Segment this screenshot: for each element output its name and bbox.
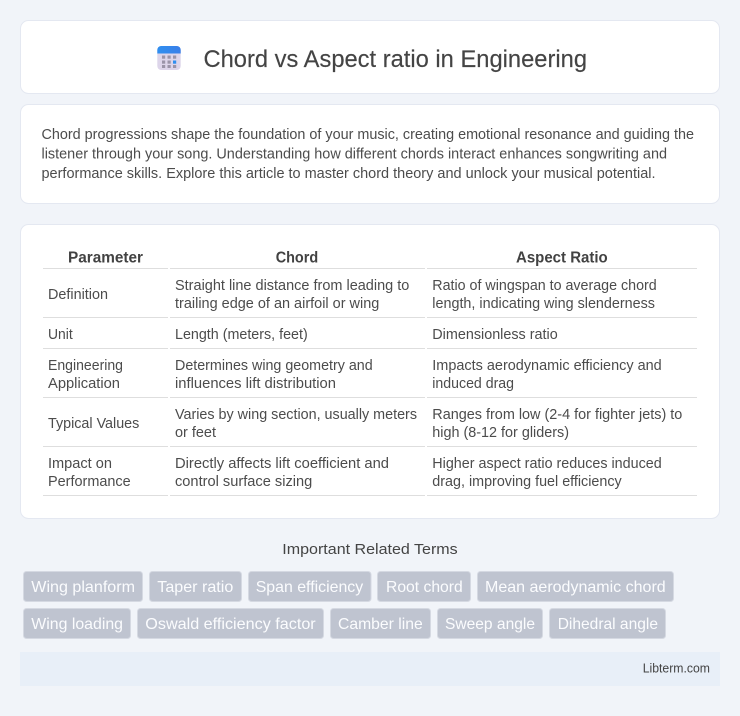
tag: camber line [330,608,430,638]
row: typical values: Varies by wing section, usually meters [175,407,417,423]
intro text: listener through your song. Understanding how different chords interact enhances songwriting and [42,146,667,162]
row: impact on performance: drag, improving fuel efficiency [432,474,622,490]
row: definition: Straight line distance from leading to [175,278,409,294]
tag: wing planform [24,572,142,602]
tag: mean aerodynamic chord: Mean aerodynamic chord [485,579,666,596]
title: Chord vs Aspect ratio in Engineering [204,46,587,73]
row: definition: Ratio of wingspan to average chord [432,278,657,294]
tag: wing loading [24,608,130,638]
tag: wing loading: Wing loading [31,616,123,633]
row: engineering application: Engineering [48,358,123,374]
row: engineering application: influences lift distribution [175,376,336,392]
row: impact on performance: Impact on [48,456,112,472]
tag: root chord [378,572,470,602]
row: definition: trailing edge of an airfoil or wing [175,296,379,312]
tag: span efficiency [248,572,371,602]
row: unit: Dimensionless ratio [432,327,558,343]
row: unit [48,327,558,343]
panel: comparison table [20,224,720,518]
row: unit: Unit [48,327,73,343]
footer [20,652,720,686]
row: impact on performance: Performance [48,474,131,490]
tag: wing planform: Wing planform [31,579,135,596]
row: unit: Length (meters, feet) [175,327,308,343]
panel: introduction [20,104,720,204]
row: typical values: or feet [175,425,216,441]
footer credit: Libterm.com [643,662,710,676]
row: typical values: high (8-12 for gliders) [432,425,569,441]
row: definition: Definition [48,287,108,303]
tag: span efficiency: Span efficiency [256,579,363,596]
tag: root chord: Root chord [386,579,463,596]
tag: dihedral angle [550,608,666,638]
tag: oswald efficiency factor [138,608,324,638]
icon: calendar [157,46,181,70]
tag: oswald efficiency factor: Oswald efficiency factor [145,616,316,633]
row: impact on performance [48,456,662,490]
row: definition: length, indicating wing slenderness [432,296,655,312]
intro text: performance skills. Explore this article to master chord theory and unlock your musical potential. [42,166,656,182]
tag: taper ratio [150,572,242,602]
table header row: Chord [276,250,318,266]
row: impact on performance: control surface sizing [175,474,312,490]
row: typical values: Ranges from low (2-4 for fighter jets) to [432,407,682,423]
row: impact on performance: Higher aspect ratio reduces induced [432,456,662,472]
heading: important related terms: Important Related Terms [282,542,458,558]
row: engineering application: induced drag [432,376,514,392]
row: engineering application: Determines wing geometry and [175,358,373,374]
panel: header [20,20,720,94]
row: engineering application: Impacts aerodynamic efficiency and [432,358,662,374]
tag: dihedral angle: Dihedral angle [558,616,658,633]
tag list [24,572,674,638]
tag: taper ratio: Taper ratio [157,579,233,596]
row: impact on performance: Directly affects lift coefficient and [175,456,389,472]
row: typical values [48,407,682,441]
row: typical values: Typical Values [48,416,139,432]
tag: sweep angle [438,608,542,638]
table header row [68,250,608,266]
row: engineering application: Application [48,376,120,392]
intro text [42,127,694,182]
tag: camber line: Camber line [338,616,423,633]
row: definition [48,278,657,312]
table header row: Aspect Ratio [516,250,608,266]
intro text: Chord progressions shape the foundation of your music, creating emotional resonance and guiding the [42,127,694,143]
table header row: Parameter [68,250,143,266]
tag: sweep angle: Sweep angle [445,616,535,633]
row: engineering application [48,358,662,392]
tag: mean aerodynamic chord [478,572,674,602]
